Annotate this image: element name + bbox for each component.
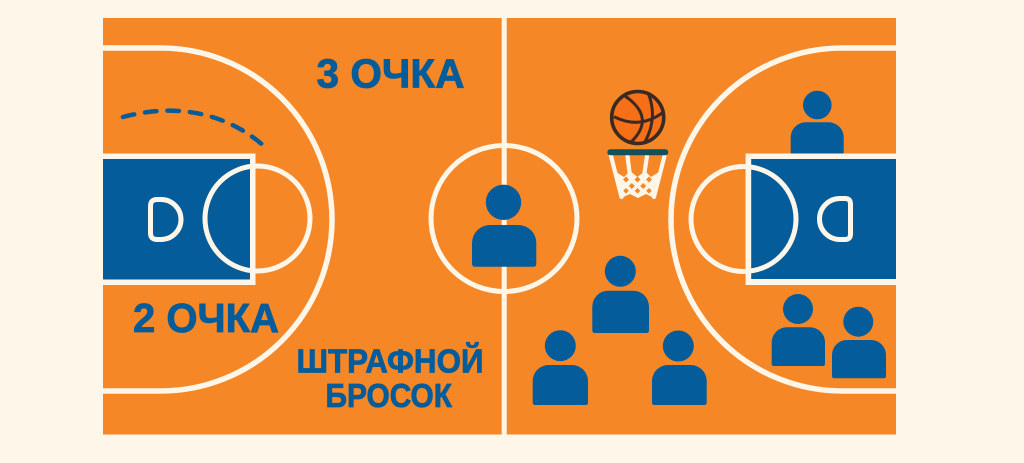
center line — [502, 18, 507, 434]
right D marker — [820, 198, 850, 240]
free throw line one: ШТРАФНОЙ — [296, 342, 484, 380]
left key outline — [103, 154, 256, 285]
right key paint — [751, 159, 896, 279]
left free-throw circle — [205, 166, 310, 271]
player: top right — [791, 91, 844, 154]
rim — [607, 149, 668, 155]
player: middle group right — [652, 330, 707, 405]
player: middle group left — [533, 330, 588, 405]
left key edge — [250, 154, 256, 285]
left three-point arc — [103, 48, 332, 391]
left D marker — [150, 200, 181, 240]
label: free throw — [296, 342, 484, 415]
player: middle group top — [592, 256, 649, 333]
left key — [103, 154, 310, 285]
label: 2 points: 2 ОЧКА — [133, 295, 279, 341]
right key — [691, 154, 896, 285]
net strands — [611, 156, 664, 197]
net holes — [623, 176, 652, 194]
left key paint — [103, 159, 250, 280]
player: center circle — [472, 185, 536, 267]
net — [611, 156, 664, 198]
right key edge — [746, 154, 751, 285]
ball — [612, 92, 664, 144]
player: lower right one — [772, 294, 825, 366]
court floor — [103, 18, 896, 434]
dashed shot trajectory — [123, 111, 264, 146]
ball body — [612, 92, 664, 144]
right key outline — [746, 154, 896, 285]
free throw line two: БРОСОК — [326, 378, 452, 415]
net lattice — [616, 171, 659, 198]
basketball court — [103, 18, 896, 434]
right free-throw circle — [691, 166, 796, 272]
label: 3 points: 3 ОЧКА — [316, 50, 464, 96]
center circle — [431, 146, 577, 292]
ball seams — [614, 93, 664, 143]
icon: basketball hoop — [607, 92, 668, 198]
right three-point arc — [671, 48, 896, 391]
player: lower right two — [832, 307, 886, 378]
